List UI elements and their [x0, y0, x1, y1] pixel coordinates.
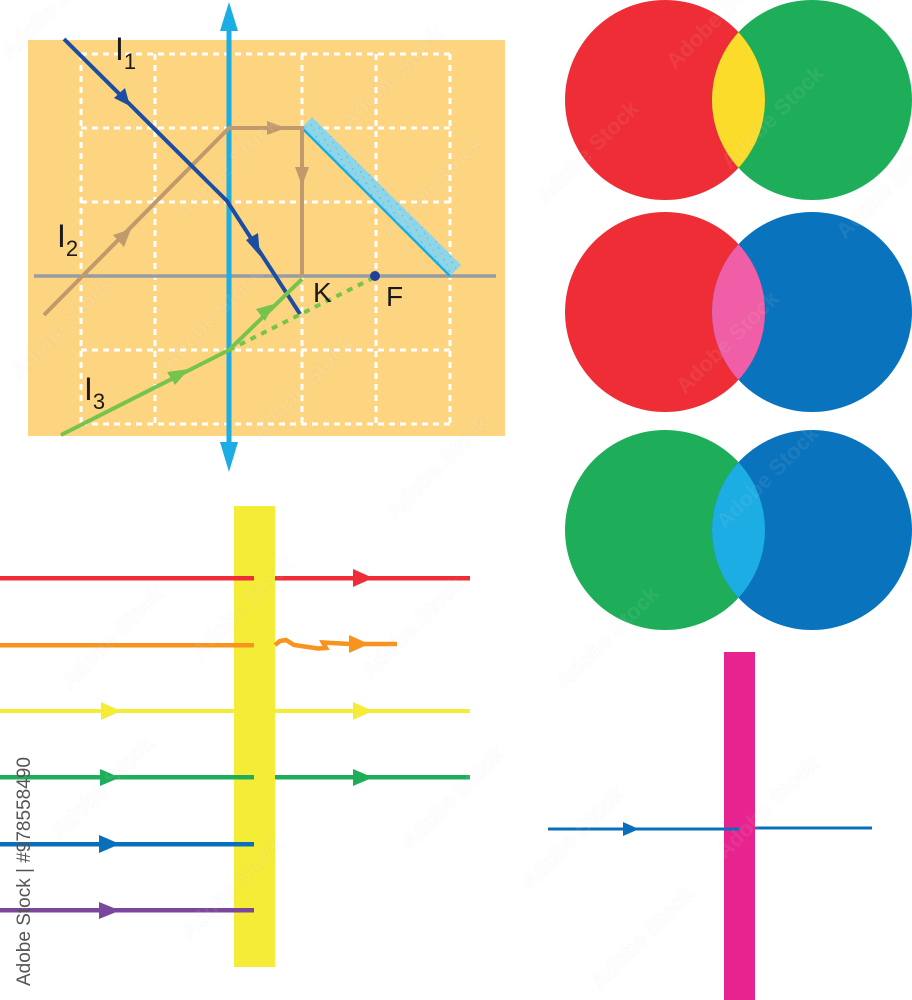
watermark tiles: Adobe Stock — [376, 130, 489, 244]
watermark tiles: Adobe Stock — [586, 880, 699, 994]
watermark tiles: Adobe Stock — [381, 410, 494, 524]
watermark tiles: Adobe Stock — [171, 110, 284, 224]
green ray — [0, 769, 470, 786]
label I3: 3 — [93, 389, 105, 414]
ray I1 — [64, 39, 300, 314]
watermark tiles: Adobe Stock — [671, 285, 784, 399]
watermark tiles: Adobe Stock — [246, 330, 359, 444]
dashed grid — [81, 54, 450, 424]
watermark tiles: Adobe Stock — [336, 20, 449, 134]
panel: magenta filter with blue ray — [548, 652, 872, 1000]
ray I3 — [61, 277, 375, 435]
watermark tiles: Adobe Stock — [356, 570, 469, 684]
outgoing blue ray — [755, 826, 872, 830]
venn: red and green — [565, 0, 912, 200]
watermark tiles: Adobe Stock — [516, 780, 629, 894]
watermark tiles: Adobe Stock — [711, 750, 824, 864]
watermark tiles: Adobe Stock — [6, 270, 119, 384]
magenta filter — [724, 652, 755, 1000]
watermark tiles: Adobe Stock — [176, 830, 289, 944]
panel: yellow filter with coloured rays — [0, 506, 470, 967]
label K: K — [313, 277, 332, 308]
watermark tiles: Adobe Stock — [46, 730, 159, 844]
red ray — [0, 569, 470, 587]
blue ray — [0, 835, 254, 853]
incoming blue ray — [548, 822, 739, 836]
watermark tiles: Adobe Stock — [56, 580, 169, 694]
ray I2 — [44, 121, 309, 315]
label I3: I — [84, 371, 93, 407]
purple ray — [0, 902, 254, 919]
focal point dot — [370, 271, 380, 281]
mirror — [302, 117, 461, 276]
watermark tiles: Adobe Stock — [711, 420, 824, 534]
panel background — [28, 40, 505, 436]
yellow ray — [0, 702, 470, 720]
label I2: I — [57, 218, 66, 254]
watermark tiles: Adobe Stock — [186, 550, 299, 664]
optical axis — [34, 274, 496, 278]
watermark tiles: Adobe Stock — [396, 740, 509, 854]
watermark tiles: Adobe Stock — [531, 95, 644, 209]
watermark tiles: Adobe Stock — [156, 260, 269, 374]
label I1: 1 — [124, 49, 136, 74]
panel: lens ray diagram — [28, 2, 505, 472]
yellow filter — [234, 506, 275, 967]
watermark tiles: Adobe Stock — [716, 60, 829, 174]
orange ray — [0, 635, 397, 653]
venn: red and blue — [565, 212, 912, 412]
label I2: 2 — [66, 236, 78, 261]
label F: F — [386, 281, 403, 312]
label I1: I — [115, 31, 124, 67]
watermark tiles: Adobe Stock — [551, 580, 664, 694]
venn: green and blue — [565, 430, 912, 630]
lens axis with arrows — [220, 2, 238, 472]
stock id watermark: Adobe Stock | #978558490 — [14, 757, 35, 986]
